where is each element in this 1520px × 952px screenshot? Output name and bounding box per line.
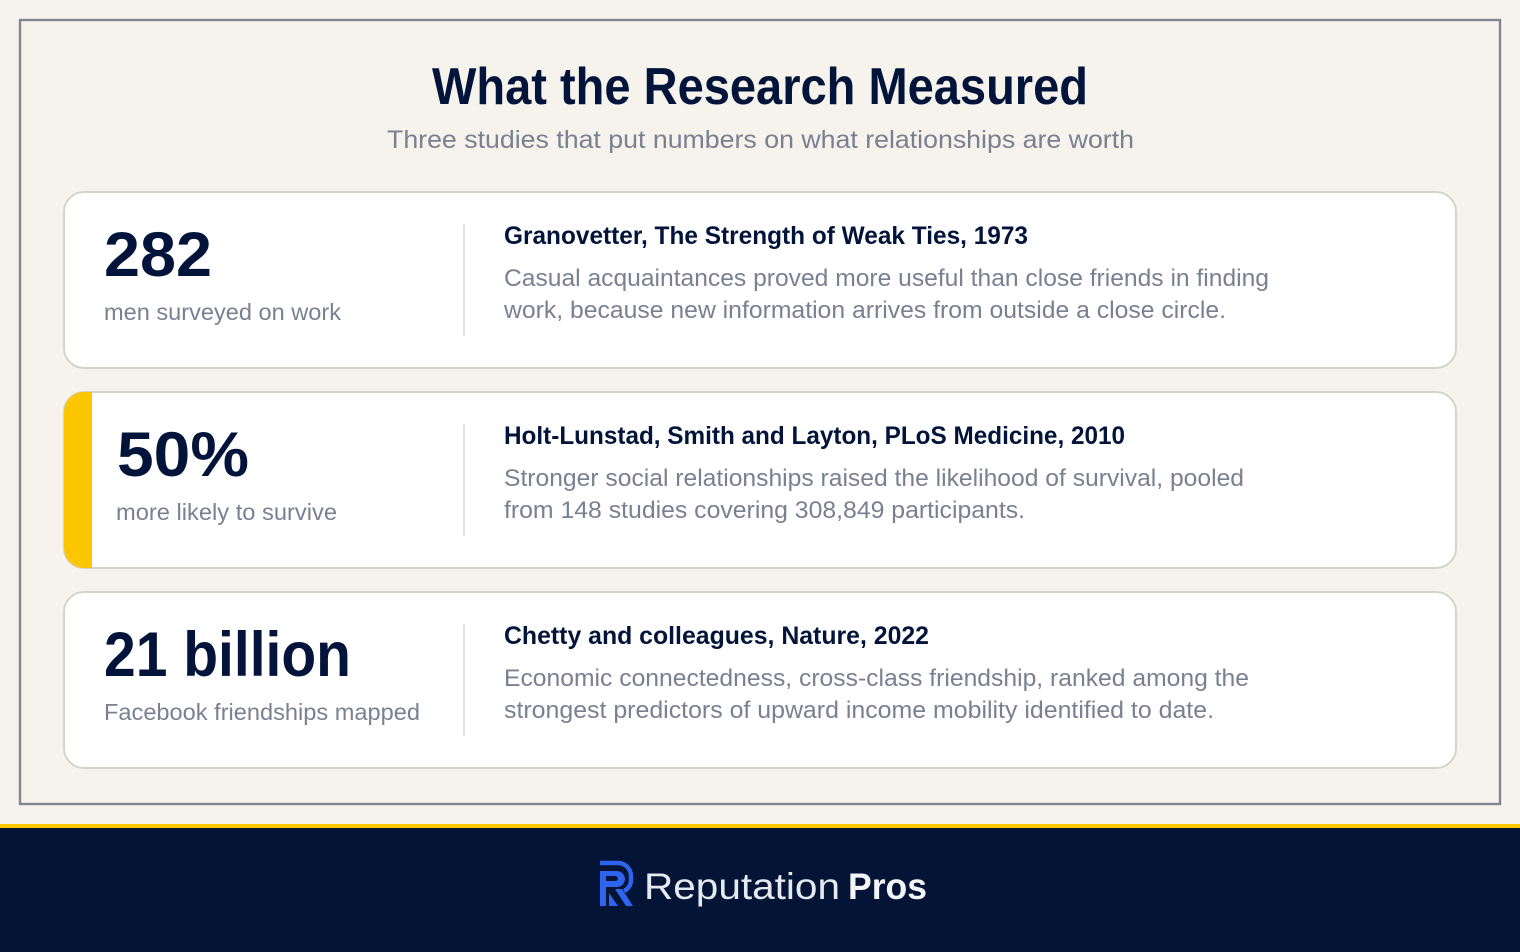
stat label: men surveyed on work	[104, 299, 342, 325]
stat label: more likely to survive	[116, 499, 337, 525]
logo wordmark: Pros	[848, 866, 927, 907]
stat label: Facebook friendships mapped	[104, 699, 420, 725]
footer band	[0, 824, 1520, 952]
study description	[503, 265, 1269, 324]
stat: 21 billion: 21 billion	[104, 620, 351, 690]
title: What the Research Measured	[432, 58, 1088, 116]
study heading: Chetty and colleagues, Nature, 2022	[504, 622, 929, 650]
study description: Casual acquaintances proved more useful than close friends in finding	[504, 265, 1269, 292]
panel: Granovetter study	[64, 192, 1456, 368]
study description	[504, 465, 1244, 524]
stat: 282: 282	[104, 220, 212, 290]
study description: from 148 studies covering 308,849 participants.	[504, 497, 1025, 524]
subtitle: Three studies that put numbers on what relationships are worth	[387, 126, 1134, 154]
study description: Stronger social relationships raised the likelihood of survival, pooled	[504, 465, 1244, 492]
logo wordmark	[644, 866, 927, 907]
study description: Economic connectedness, cross-class friendship, ranked among the	[504, 665, 1249, 692]
logo wordmark: Reputation	[644, 866, 840, 907]
study description: strongest predictors of upward income mobility identified to date.	[504, 697, 1214, 724]
study description: work, because new information arrives from outside a close circle.	[503, 297, 1226, 324]
study heading: Holt-Lunstad, Smith and Layton, PLoS Medicine, 2010	[504, 422, 1125, 450]
panel: Holt-Lunstad study (highlighted)	[64, 392, 1456, 568]
stat: 50%: 50%	[117, 420, 249, 490]
study description	[504, 665, 1249, 724]
panel: Chetty study	[64, 592, 1456, 768]
icon: Reputation Pros logo mark	[600, 863, 633, 906]
study heading: Granovetter, The Strength of Weak Ties, 1973	[504, 222, 1028, 250]
yellow accent bar	[64, 392, 92, 568]
